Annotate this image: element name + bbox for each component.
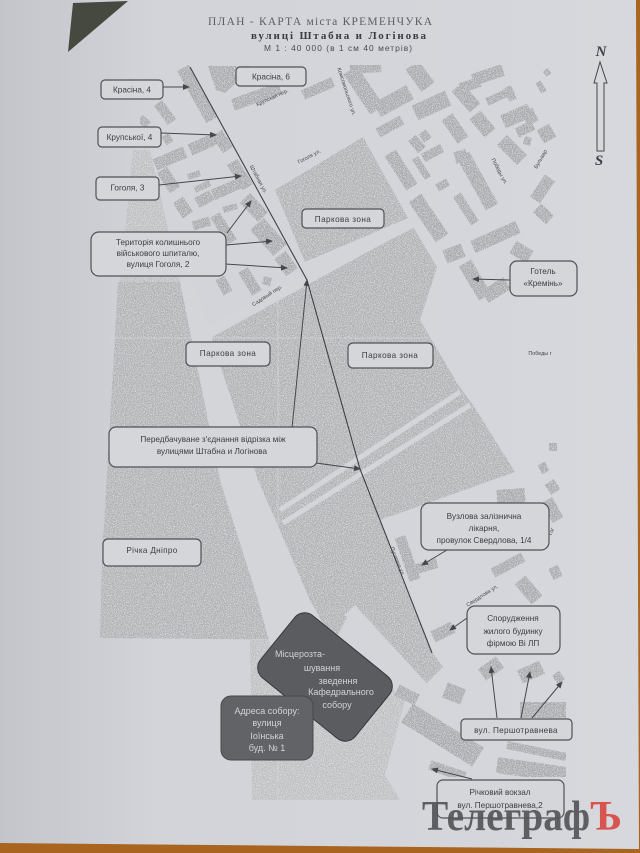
compass north-south arrow: S xyxy=(595,153,603,169)
label: railway hospital: провулок Свердлова, 1/4 xyxy=(437,536,532,545)
callout: cathedral address: Адреса собору: xyxy=(235,706,299,716)
street labels: Пушкина ул. xyxy=(388,546,406,577)
street labels: Гог xyxy=(548,527,556,536)
label: Dnipro river xyxy=(103,539,201,566)
label: Pershotravneva street xyxy=(461,719,572,740)
label: Pershotravneva street: вул. Першотравнева xyxy=(474,726,558,735)
street labels: Штабная ул. xyxy=(248,164,268,195)
callout: cathedral address: Іоїнська xyxy=(250,731,284,741)
compass north-south arrow: N xyxy=(595,44,608,60)
label: hotel Kremin: «Кремінь» xyxy=(523,279,563,288)
label: park zone west xyxy=(186,342,270,366)
label: Крупської, 4 xyxy=(98,127,161,147)
label: Гоголя, 3: Гоголя, 3 xyxy=(111,184,145,192)
callout: cathedral location: Місцерозта- xyxy=(275,649,325,659)
label: park zone west: Паркова зона xyxy=(200,349,256,358)
map: river bank and roads xyxy=(110,222,480,800)
map: parks and grey land xyxy=(100,137,515,800)
label: residential construction xyxy=(467,606,560,654)
map: building blocks xyxy=(140,65,566,777)
label: park zone north xyxy=(302,209,384,228)
title block: ПЛАН - КАРТА міста КРЕМЕНЧУКА xyxy=(208,16,433,28)
street labels: Победы ул. xyxy=(490,158,508,186)
label: Гоголя, 3 xyxy=(96,177,159,200)
label: hotel Kremin xyxy=(510,261,577,296)
label: Крупської, 4: Крупської, 4 xyxy=(107,133,153,142)
label: park zone east: Паркова зона xyxy=(362,351,418,360)
label: planned connection: Передбачуване з'єднання відрізка між xyxy=(140,435,286,444)
label: Красіна, 6: Красіна, 6 xyxy=(252,72,290,82)
title block xyxy=(208,16,433,53)
callout: cathedral address xyxy=(221,696,313,760)
title block: вулиці Штабна и Логінова xyxy=(251,30,426,42)
label: planned connection xyxy=(109,427,317,467)
callout: cathedral location: шування xyxy=(304,663,340,673)
label: residential construction: фірмою Ві ЛП xyxy=(487,639,539,648)
label: residential construction: жилого будинку xyxy=(483,627,543,636)
arrows from labels xyxy=(159,87,562,779)
callout: cathedral location xyxy=(252,608,398,746)
label: military hospital territory: вулиця Гоголя, 2 xyxy=(127,260,190,269)
corner triangle mark xyxy=(68,1,128,52)
label: railway hospital xyxy=(421,503,549,550)
callout: cathedral address: вулиця xyxy=(252,718,282,728)
callout: cathedral location: зведення xyxy=(319,676,357,686)
callout: cathedral location: Кафедрального xyxy=(308,687,374,697)
street labels: Свердлова ул. xyxy=(466,584,499,609)
label: railway hospital: лікарня, xyxy=(469,524,499,533)
callout: cathedral address: буд. № 1 xyxy=(249,743,285,753)
label: military hospital territory: військового шпиталю, xyxy=(117,249,199,258)
street labels: Садовый пер. xyxy=(251,283,284,308)
watermark: Telegraf: Ъ xyxy=(590,794,622,840)
label: planned connection: вулицями Штабна и Логінова xyxy=(157,447,268,456)
title block: М 1 : 40 000 (в 1 см 40 метрів) xyxy=(264,43,412,53)
label: residential construction: Спорудження xyxy=(487,614,539,623)
label: Dnipro river: Річка Дніпро xyxy=(126,546,178,555)
callout: cathedral location: собору xyxy=(322,700,352,710)
label: Красіна, 4: Красіна, 4 xyxy=(113,86,151,94)
label: military hospital territory: Територія колишнього xyxy=(116,238,201,247)
label: river station xyxy=(437,780,564,818)
street labels: Гоголя ул. xyxy=(297,149,322,166)
label: river station: Річковий вокзал xyxy=(469,788,531,797)
label: park zone north: Паркова зона xyxy=(315,215,371,224)
label: river station: вул. Першотравнева,2 xyxy=(457,801,543,810)
label: military hospital territory xyxy=(91,232,226,276)
watermark: Telegraf: Телеграф xyxy=(422,794,590,840)
label: hotel Kremin: Готель xyxy=(530,267,556,276)
street labels: Бульвар xyxy=(533,149,549,170)
street labels: Крупская пер. xyxy=(256,88,290,108)
street labels xyxy=(248,67,556,609)
street labels: Комсомольского ул. xyxy=(335,67,357,116)
street labels: Победы г xyxy=(528,351,552,357)
label: Красіна, 6 xyxy=(236,67,306,86)
label: Красіна, 4 xyxy=(101,80,163,99)
compass north-south arrow xyxy=(594,44,608,169)
label: park zone east xyxy=(348,343,433,368)
label: railway hospital: Вузлова залізнична xyxy=(447,512,522,521)
street: Shtabna to Loginova line xyxy=(190,67,432,653)
